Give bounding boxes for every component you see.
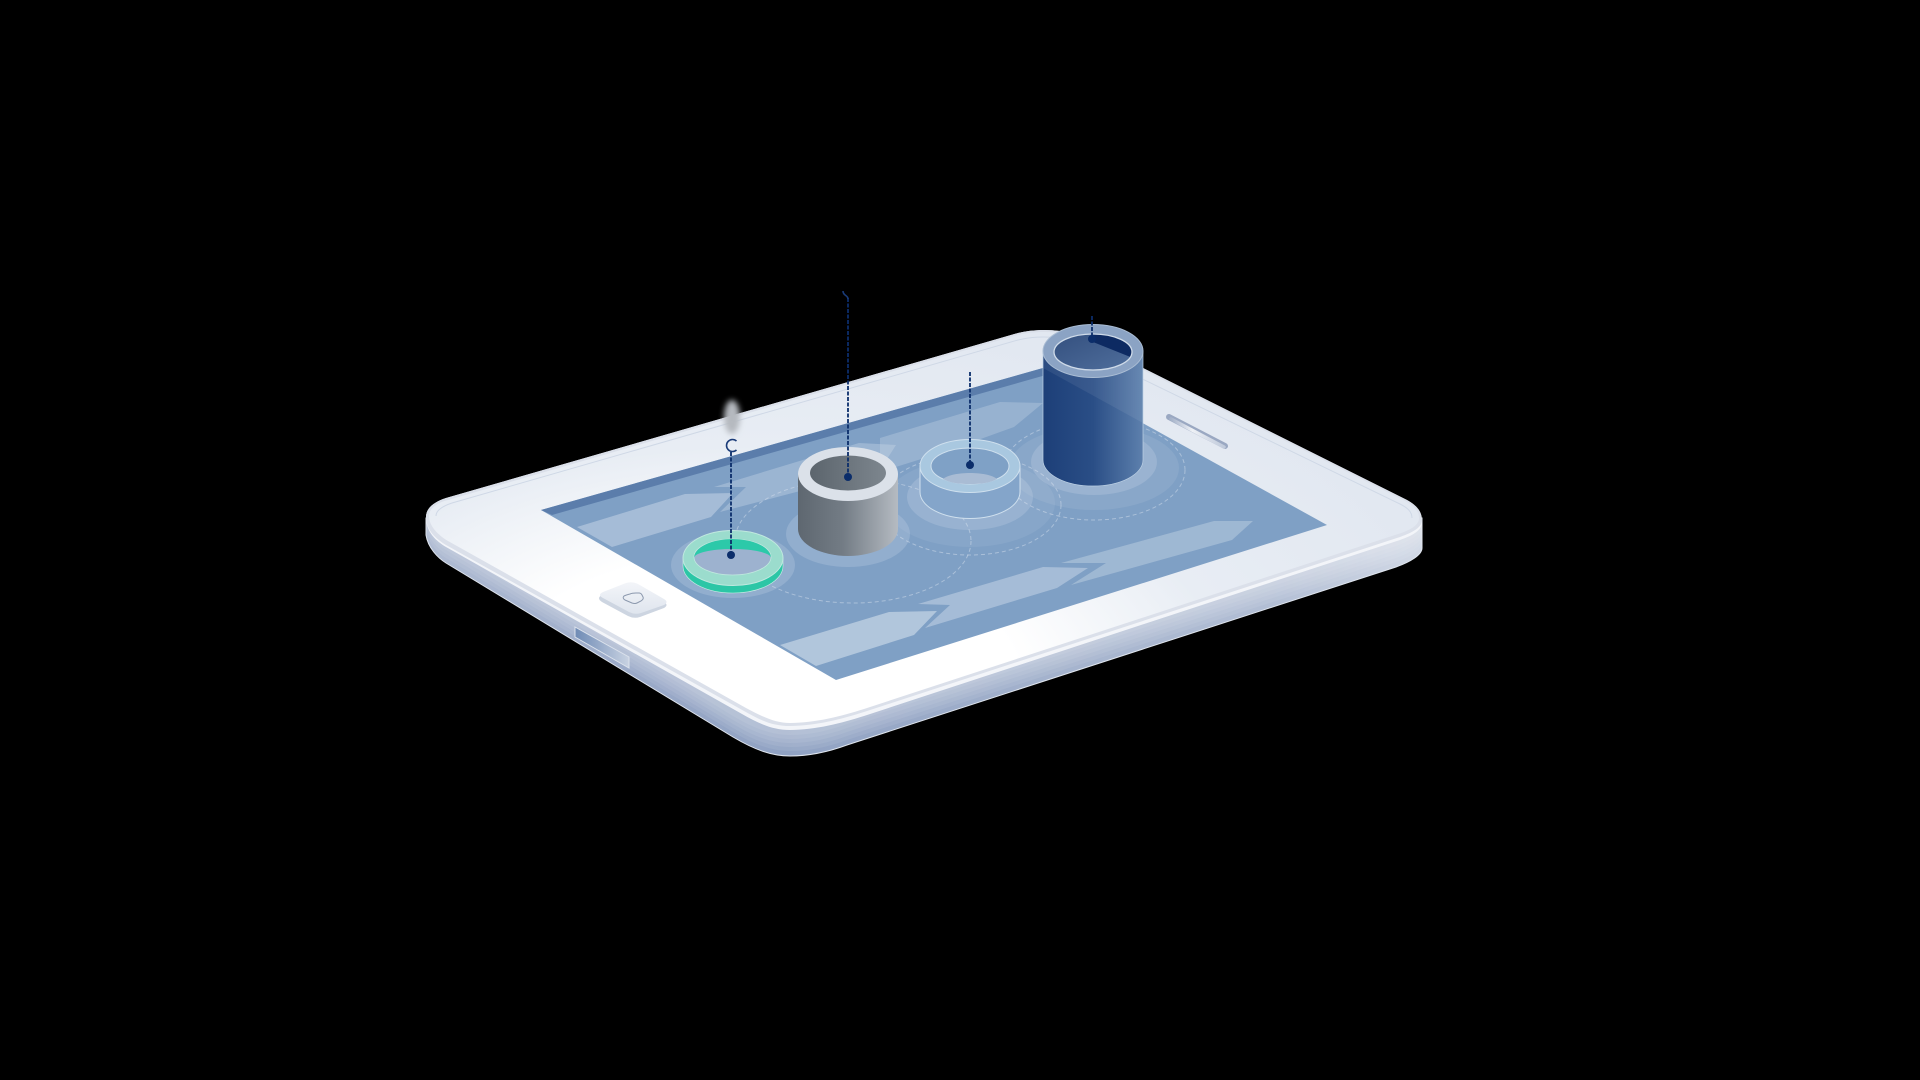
- tablet body side: [426, 497, 1422, 756]
- green ring inner wall: [694, 539, 771, 558]
- ring: light blue: [920, 440, 1020, 518]
- line: green: [730, 452, 732, 555]
- tablet inner bevel line: [436, 337, 1412, 518]
- grey cylinder top: [798, 447, 898, 501]
- side slot: [575, 627, 629, 668]
- blurred marker: [724, 400, 740, 434]
- navy cylinder hole: [1054, 334, 1132, 370]
- background arrows: [577, 402, 1253, 666]
- orbit around blue cylinder: [1003, 420, 1185, 520]
- button icon: [623, 593, 643, 604]
- light blue ring top: [920, 440, 1020, 492]
- halo blue: [1031, 429, 1157, 495]
- arrow bottom 1: [780, 611, 937, 666]
- dot: navy: [1088, 335, 1096, 343]
- speaker groove: [1169, 417, 1225, 446]
- arrow top 3: [880, 402, 1043, 472]
- marker lines: [727, 291, 1096, 559]
- grey cylinder hole: [810, 456, 886, 490]
- line: grey: [847, 298, 849, 477]
- dot: light blue: [966, 461, 974, 469]
- navy cylinder top: [1043, 324, 1143, 378]
- navy cylinder hole edge: [1054, 334, 1132, 370]
- orbit around light blue ring: [879, 455, 1061, 555]
- light blue ring hole: [931, 448, 1009, 484]
- green ring top: [683, 530, 783, 586]
- home button: [599, 582, 666, 618]
- light blue ring side: [920, 466, 1020, 518]
- screen surface: [541, 368, 1327, 680]
- navy cylinder translucency overlay: [1043, 351, 1143, 423]
- navy cylinder inner shadow: [1093, 334, 1132, 357]
- orbit around grey cylinder: [735, 479, 971, 603]
- navy cylinder side: [1043, 351, 1143, 486]
- grey cylinder side: [798, 474, 898, 556]
- tablet top face: [429, 332, 1419, 723]
- screen top shadow band: [541, 368, 1053, 515]
- arrow top 2: [714, 443, 896, 512]
- halos: [671, 426, 1179, 598]
- line: navy: [1091, 316, 1093, 339]
- tablet rim: [426, 330, 1422, 730]
- green ring hole: [694, 539, 771, 575]
- curl: grey: [843, 291, 848, 299]
- arrow bottom 3: [1061, 521, 1253, 585]
- ring cap: green: [727, 439, 736, 452]
- button body: [600, 582, 666, 614]
- halo grey: [786, 501, 910, 567]
- light blue ring floor: [943, 473, 997, 484]
- halo outer light blue: [885, 459, 1055, 547]
- speaker highlight: [1171, 419, 1224, 447]
- cylinder: navy: [1043, 324, 1143, 486]
- green ring side: [683, 558, 783, 593]
- ring: green: [683, 530, 783, 593]
- cylinder: grey: [798, 447, 898, 556]
- line: light blue: [969, 372, 971, 465]
- screen: [541, 368, 1327, 680]
- halo outer blue: [1009, 426, 1179, 510]
- dot: green: [727, 551, 735, 559]
- button shadow edge: [599, 585, 666, 618]
- halo light blue: [907, 464, 1033, 530]
- arrow top 1: [577, 493, 733, 547]
- arrow bottom 2: [918, 567, 1088, 628]
- illustration: isometric tablet: [426, 291, 1422, 756]
- halo green: [671, 532, 795, 598]
- tablet rim shade: [426, 330, 1422, 726]
- dashed orbits: [735, 420, 1185, 603]
- speaker: [1169, 417, 1225, 447]
- dot: grey: [844, 473, 852, 481]
